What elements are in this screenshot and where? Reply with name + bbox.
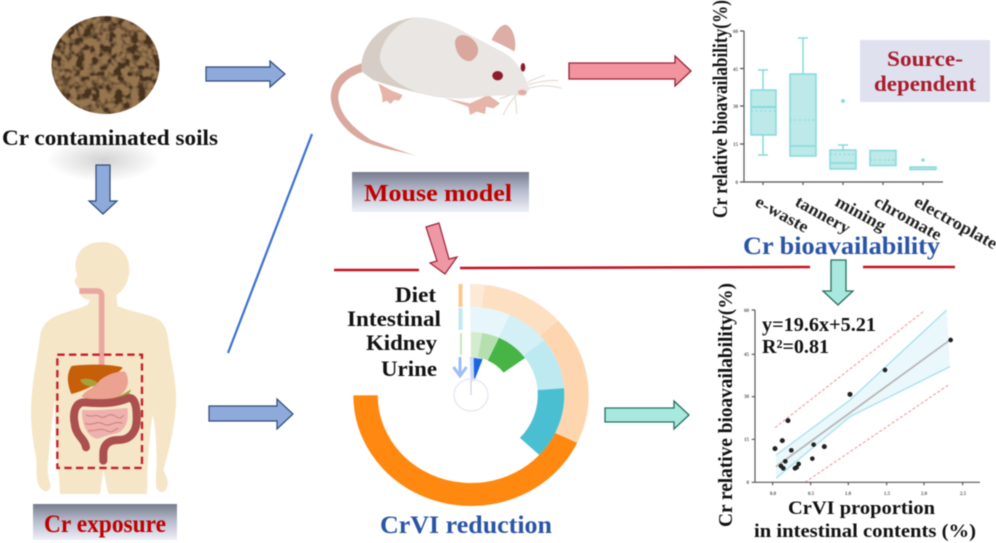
esophagus <box>79 291 102 380</box>
box: mining <box>830 100 856 169</box>
arrow: mouse to reduction <box>426 223 457 274</box>
arrow: exposure to reduction <box>209 399 293 429</box>
chart: circular bar of CrVI reduction <box>322 254 620 536</box>
diagonal blue line <box>228 134 312 353</box>
category labels: mining <box>832 192 890 235</box>
near ear <box>455 35 478 61</box>
back shading <box>362 17 423 94</box>
body <box>362 17 529 99</box>
legend arrow <box>454 357 466 376</box>
hind paw <box>378 83 403 104</box>
centre circle <box>454 379 488 411</box>
box: tannery <box>790 38 816 156</box>
legend: compartment bars <box>454 284 466 376</box>
box: electroplate <box>910 159 936 170</box>
regression equation: y=19.6x+5.21 <box>762 314 876 336</box>
tick labels: 45 <box>744 353 750 358</box>
category labels: chromate <box>871 192 945 245</box>
tail <box>331 63 418 157</box>
tick labels: 30 <box>744 395 750 400</box>
confidence band <box>776 310 950 478</box>
heading: Cr contaminated soils: Cr contaminated soils <box>2 125 218 150</box>
scatter plot: regression: 0.5 <box>808 492 815 497</box>
legend labels: Urine <box>381 356 437 381</box>
ring: urine <box>443 358 499 421</box>
category labels: e-waste <box>752 192 812 237</box>
heading: Cr contaminated soils <box>2 125 218 182</box>
arrow: soils to mouse <box>206 61 285 87</box>
x-axis title: CrVI proportion <box>788 498 935 519</box>
tick labels <box>733 30 738 186</box>
nose <box>518 90 527 95</box>
gallbladder <box>80 379 99 386</box>
scatter plot: regression: 0.0 <box>770 492 777 497</box>
legend labels: Diet <box>395 282 437 307</box>
axis title: Cr relative bioavailability(%) <box>715 283 737 527</box>
whiskers <box>500 75 562 115</box>
pancreas <box>85 389 131 403</box>
scatter plot: regression: 1.5 <box>884 492 891 497</box>
tick labels: 60 <box>744 309 750 314</box>
ring: intestinal <box>359 289 583 501</box>
x-axis title <box>754 498 976 542</box>
tick labels: 15 <box>733 143 738 148</box>
axes <box>752 310 980 485</box>
x-axis title: in intestinal contents (%) <box>754 521 976 542</box>
tick labels: 0 <box>736 181 738 186</box>
tick labels <box>744 309 750 486</box>
tick labels: 60 <box>733 30 738 35</box>
tick labels: 15 <box>744 438 750 443</box>
category labels: tannery <box>792 192 854 238</box>
label: Cr exposure <box>33 504 177 540</box>
tick labels: 45 <box>733 68 738 73</box>
stomach <box>82 372 128 400</box>
callout: Source-dependent: dependent <box>874 71 977 96</box>
label: Cr exposure: Cr exposure <box>44 511 166 538</box>
icon: human body with digestive organs <box>31 242 176 494</box>
regression equation: R²=0.81 <box>762 336 829 358</box>
tick labels: 30 <box>733 105 738 110</box>
far ear <box>492 25 515 52</box>
category labels <box>752 192 996 253</box>
plot geometry <box>752 310 980 485</box>
arrow: mouse to bioavailability <box>569 56 691 86</box>
large intestine <box>74 398 137 461</box>
arrow: bioavailability to regression <box>823 260 853 305</box>
front paws <box>445 95 500 115</box>
regression equation <box>762 314 876 358</box>
tick labels: 0 <box>746 481 750 486</box>
body silhouette <box>31 242 176 494</box>
soil photo <box>50 15 162 115</box>
scatter plot: regression: 2.5 <box>960 492 967 497</box>
scatter plot: regression: 1.0 <box>845 492 852 497</box>
axes <box>740 31 943 185</box>
red divider lines <box>334 267 955 270</box>
category labels: electroplate <box>911 192 996 253</box>
prediction bounds <box>775 312 950 482</box>
liver <box>68 365 123 394</box>
dashed region <box>57 355 142 468</box>
label: Mouse model <box>352 172 529 212</box>
regression line <box>776 340 950 467</box>
icon: mouse <box>331 17 562 157</box>
arrow: soils to exposure <box>89 165 117 214</box>
ring: kidney <box>400 328 542 462</box>
box: chromate <box>870 150 896 166</box>
heading: Cr bioavailability: Cr bioavailability <box>743 233 941 260</box>
arrow: reduction to regression <box>605 401 689 429</box>
heading: CrVI reduction: CrVI reduction <box>380 512 552 539</box>
data points <box>772 338 953 471</box>
legend labels: Intestinal <box>347 306 441 331</box>
scatter plot: regression <box>715 283 980 542</box>
label: Mouse model: Mouse model <box>364 181 512 207</box>
ring: diet <box>322 254 620 536</box>
legend labels: Kidney <box>366 330 437 355</box>
small intestine <box>82 408 128 439</box>
eyes <box>492 71 503 80</box>
box plot: Cr bioavailability by source <box>708 0 996 253</box>
scatter plot: regression: 2.0 <box>921 492 928 497</box>
callout: Source-dependent <box>860 40 990 102</box>
legend labels <box>347 282 441 381</box>
box: e-waste <box>751 70 776 155</box>
callout: Source-dependent: Source- <box>887 46 963 71</box>
